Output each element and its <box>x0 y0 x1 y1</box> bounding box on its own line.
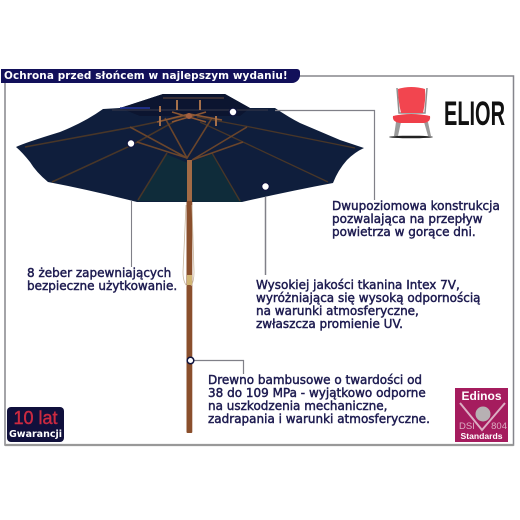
text: fabric: Wysokiej jakości tkanina Intex 7V, <box>256 278 460 292</box>
text: ribs: bezpieczne użytkowanie. <box>27 279 177 293</box>
text: bamboo wood: zadrapania i warunki atmosferyczne. <box>208 412 430 426</box>
badge: 10 years warranty <box>7 407 64 442</box>
text: two-tier construction <box>332 199 500 239</box>
content frame <box>5 76 514 445</box>
connector: fabric <box>262 183 269 275</box>
upper tier shade <box>120 94 250 116</box>
pole <box>187 160 192 201</box>
text: fabric: zwłaszcza promienie UV. <box>256 317 403 331</box>
text: fabric: na warunki atmosferyczne, <box>256 304 419 318</box>
ribs <box>25 115 355 201</box>
text: fabric <box>256 278 481 331</box>
badge: Edinos standards: Edinos <box>461 389 502 403</box>
text: ribs: 8 żeber zapewniających <box>27 266 171 280</box>
lower centre panel <box>137 154 242 202</box>
badge: 10 years warranty: Gwarancji <box>9 429 62 440</box>
connector: wood <box>187 357 244 374</box>
connector: upper tier <box>229 108 374 200</box>
text: two-tier construction: pozwalająca na przepływ <box>332 212 483 226</box>
badge: Edinos standards: Standards <box>460 431 503 441</box>
badge: Edinos standards <box>455 388 508 442</box>
text: two-tier construction: Dwupoziomowa konstrukcja <box>332 199 500 213</box>
badge: 10 years warranty: 10 lat <box>13 408 58 428</box>
text: fabric: wyróżniająca się wysoką odpornością <box>256 291 481 305</box>
title bar: Ochrona przed słońcem w najlepszym wydaniu! <box>4 70 288 82</box>
text: bamboo wood: 38 do 109 MPa - wyjątkowo odporne <box>208 386 426 400</box>
connector: ribs <box>127 140 135 267</box>
icon: red chair <box>389 87 433 138</box>
badge: Edinos standards: 804 <box>491 421 507 432</box>
canopy <box>16 94 364 202</box>
blue highlight <box>120 107 150 109</box>
badge: Edinos standards: DSI <box>459 421 475 432</box>
struts and hub <box>112 98 268 160</box>
text: bamboo wood <box>208 373 430 426</box>
pole cord and clip <box>183 205 194 286</box>
umbrella <box>16 94 364 433</box>
text: bamboo wood: Drewno bambusowe o twardości od <box>208 373 422 387</box>
text: two-tier construction: powietrza w gorące dni. <box>332 225 476 239</box>
text: ribs <box>27 266 177 293</box>
text: bamboo wood: na uszkodzenia mechaniczne, <box>208 399 387 413</box>
